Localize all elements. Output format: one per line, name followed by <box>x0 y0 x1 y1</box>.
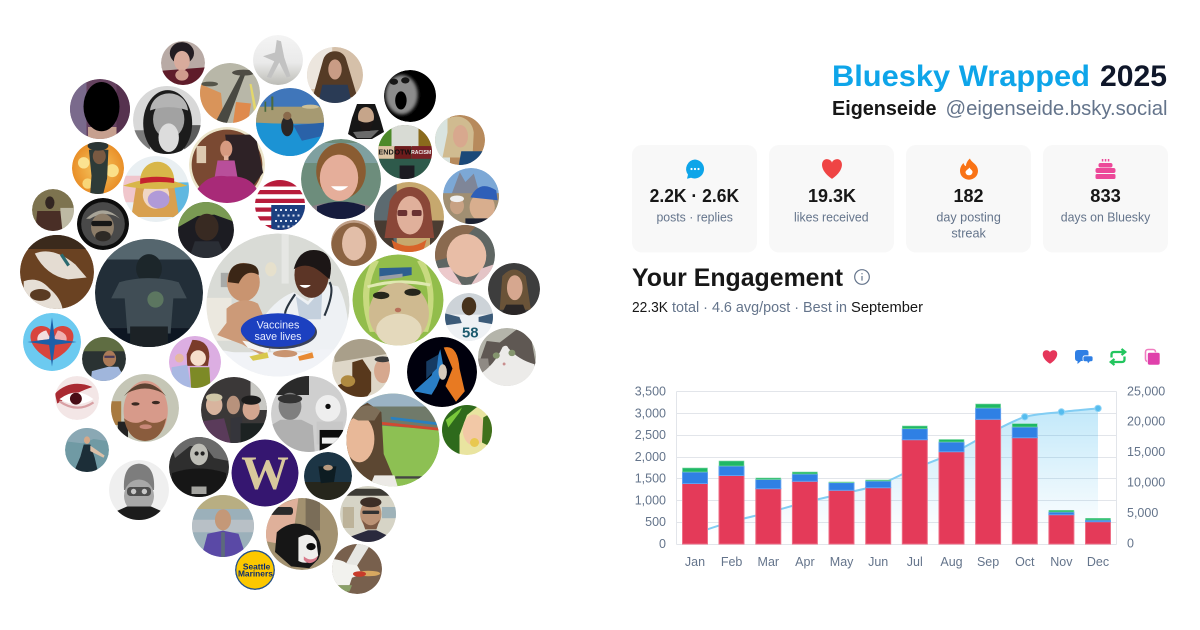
avatar: goose with sandwich <box>332 544 382 594</box>
right axis labels: 0 <box>1127 536 1134 550</box>
avatar: space needle art <box>200 63 260 123</box>
avatar: brunette woman <box>488 263 540 315</box>
avatar: bearded cartoon <box>348 104 384 139</box>
avatar: dark teal image <box>304 452 352 500</box>
month labels: Apr <box>795 555 815 569</box>
chart legend <box>1043 349 1160 365</box>
right axis labels: 10,000 <box>1127 476 1165 490</box>
avatar: three people <box>201 377 267 443</box>
avatar: University of Washington W: W <box>241 448 289 500</box>
avatar: compass heart <box>23 313 81 371</box>
stat value: 19.3K <box>808 185 857 206</box>
avatar: woman at stadium <box>345 394 440 486</box>
avatar: smiling woman with curly hair <box>301 139 381 219</box>
avatar: red eye <box>55 376 99 420</box>
badge text: vaccines save lives <box>254 320 302 343</box>
month labels: Jun <box>868 555 888 569</box>
chart: monthly engagement <box>635 384 1165 569</box>
avatar: black silhouette on purple <box>70 79 130 139</box>
avatar: University of Washington W <box>232 440 298 506</box>
avatar: football player from behind <box>95 239 203 347</box>
avatar: bearded man with raised brow <box>111 374 179 442</box>
legend icon: replies <box>1075 350 1093 364</box>
stat label: day posting <box>936 210 1001 224</box>
stat value: 2.2K · 2.6K <box>650 185 740 206</box>
avatar: woman in pink dress <box>189 127 265 203</box>
panel: posts and replies <box>632 145 757 252</box>
legend icon: reposts <box>1111 349 1125 365</box>
stat label: days on Bluesky <box>1061 210 1151 224</box>
panel: likes received <box>769 145 894 252</box>
avatar: Seattle Mariners logo <box>235 550 275 590</box>
avatar: bald man with glasses <box>82 337 126 381</box>
bars: reposts <box>682 404 1110 520</box>
stat label line two: streak <box>951 226 986 240</box>
left axis labels: 3,000 <box>635 406 666 420</box>
avatar: long-haired cat <box>478 328 536 386</box>
summary line: total · 4.6 avg/post · Best in <box>672 300 847 316</box>
stat value: 182 <box>954 185 984 206</box>
month labels: Dec <box>1087 555 1109 569</box>
avatar cluster <box>20 35 540 594</box>
month labels <box>685 555 1109 569</box>
right axis labels: 15,000 <box>1127 445 1165 459</box>
icon: chat bubble <box>686 160 704 179</box>
avatar: fire and ice hands <box>407 337 477 407</box>
left axis labels: 1,000 <box>635 494 666 508</box>
stat label: posts · replies <box>656 210 733 224</box>
avatar: dancer painting <box>65 428 109 472</box>
summary line: September <box>851 300 923 316</box>
avatar: man in purple shirt <box>192 495 254 557</box>
icon: heart <box>822 159 842 179</box>
bars: likes <box>682 419 1110 544</box>
stat label: likes received <box>794 210 869 224</box>
summary line <box>632 300 923 316</box>
profile name: Eigenseide <box>832 97 936 120</box>
avatar: woman and black and white dog <box>266 498 338 570</box>
avatar: man with sunglasses <box>77 198 129 250</box>
left axis labels: 2,000 <box>635 450 666 464</box>
title text: 2025: 2025 <box>1100 60 1167 93</box>
stat value: 833 <box>1090 185 1121 206</box>
icon: flame <box>960 158 978 180</box>
left axis labels: 500 <box>645 515 666 529</box>
right axis labels: 20,000 <box>1127 414 1165 428</box>
icon: birthday cake <box>1096 159 1116 179</box>
avatar: woman closeup <box>435 225 495 285</box>
avatar: man and dog black and white <box>271 376 347 452</box>
avatar: dark silhouette <box>178 202 234 258</box>
legend icon: likes <box>1043 350 1057 364</box>
month labels: Jul <box>907 555 923 569</box>
month labels: Jan <box>685 555 705 569</box>
month labels: Oct <box>1015 555 1035 569</box>
avatar: cat in a lime <box>352 254 444 346</box>
avatar: black ghost <box>384 70 436 122</box>
line markers <box>1022 405 1101 420</box>
avatar: man in cap and hoodie <box>133 86 201 157</box>
avatar: end OTW racism <box>378 125 432 179</box>
legend icon: quotes <box>1146 350 1160 365</box>
bars: replies <box>682 408 1110 522</box>
avatar: woman with long hair <box>307 47 363 103</box>
avatar: straw hat drawing with mask <box>123 156 189 222</box>
cumulative area <box>695 408 1098 544</box>
left axis labels: 1,500 <box>635 472 666 486</box>
summary line: 22.3K <box>632 300 668 316</box>
cumulative line <box>695 408 1098 533</box>
title <box>832 60 1167 93</box>
month labels: Mar <box>758 555 779 569</box>
avatar: doctor and baby with vaccines badge <box>206 234 350 376</box>
panel: day posting streak <box>906 145 1031 252</box>
left axis labels <box>635 384 666 551</box>
panel: days on Bluesky <box>1043 145 1168 252</box>
grid lines <box>676 392 1116 544</box>
avatar: man in front of fire <box>72 141 124 194</box>
avatar: anime girl <box>169 336 221 388</box>
month labels: Sep <box>977 555 999 569</box>
month labels: Feb <box>721 555 742 569</box>
avatar: woman with dark hair <box>161 41 205 85</box>
avatar: pool with palm trees <box>256 88 324 156</box>
section heading: Your Engagement: Your Engagement <box>632 264 844 292</box>
avatar: woman with glasses and red hair <box>374 182 444 252</box>
avatar: masked wrestler <box>109 460 169 520</box>
avatar: grey figure <box>253 35 303 85</box>
avatar: football player number 58 <box>445 293 493 341</box>
left axis labels: 0 <box>659 537 666 551</box>
avatar: man in camo <box>32 189 74 231</box>
avatar: American flag <box>255 180 305 230</box>
icon: info <box>855 270 869 284</box>
month labels: Aug <box>940 555 963 569</box>
month labels: May <box>830 555 854 569</box>
avatar: selfie at Disney castle <box>443 168 499 224</box>
left axis labels: 2,500 <box>635 428 666 442</box>
right axis labels: 25,000 <box>1127 384 1165 398</box>
left axis labels: 3,500 <box>635 384 666 398</box>
avatar: skeleton football player <box>169 437 229 497</box>
avatar: man with glasses in car <box>340 486 396 542</box>
right axis labels: 5,000 <box>1127 506 1158 520</box>
month labels: Nov <box>1050 555 1073 569</box>
right axis labels <box>1127 384 1165 550</box>
profile handle: @eigenseide.bsky.social <box>946 97 1168 120</box>
avatar: woman with curly light hair <box>331 220 377 268</box>
title text: Bluesky Wrapped: Bluesky Wrapped <box>832 60 1090 93</box>
avatar: woman with green hair <box>442 405 492 455</box>
avatar: blonde woman <box>435 115 485 165</box>
avatar: man with horse <box>332 339 391 397</box>
avatar: brown dog <box>20 235 94 309</box>
